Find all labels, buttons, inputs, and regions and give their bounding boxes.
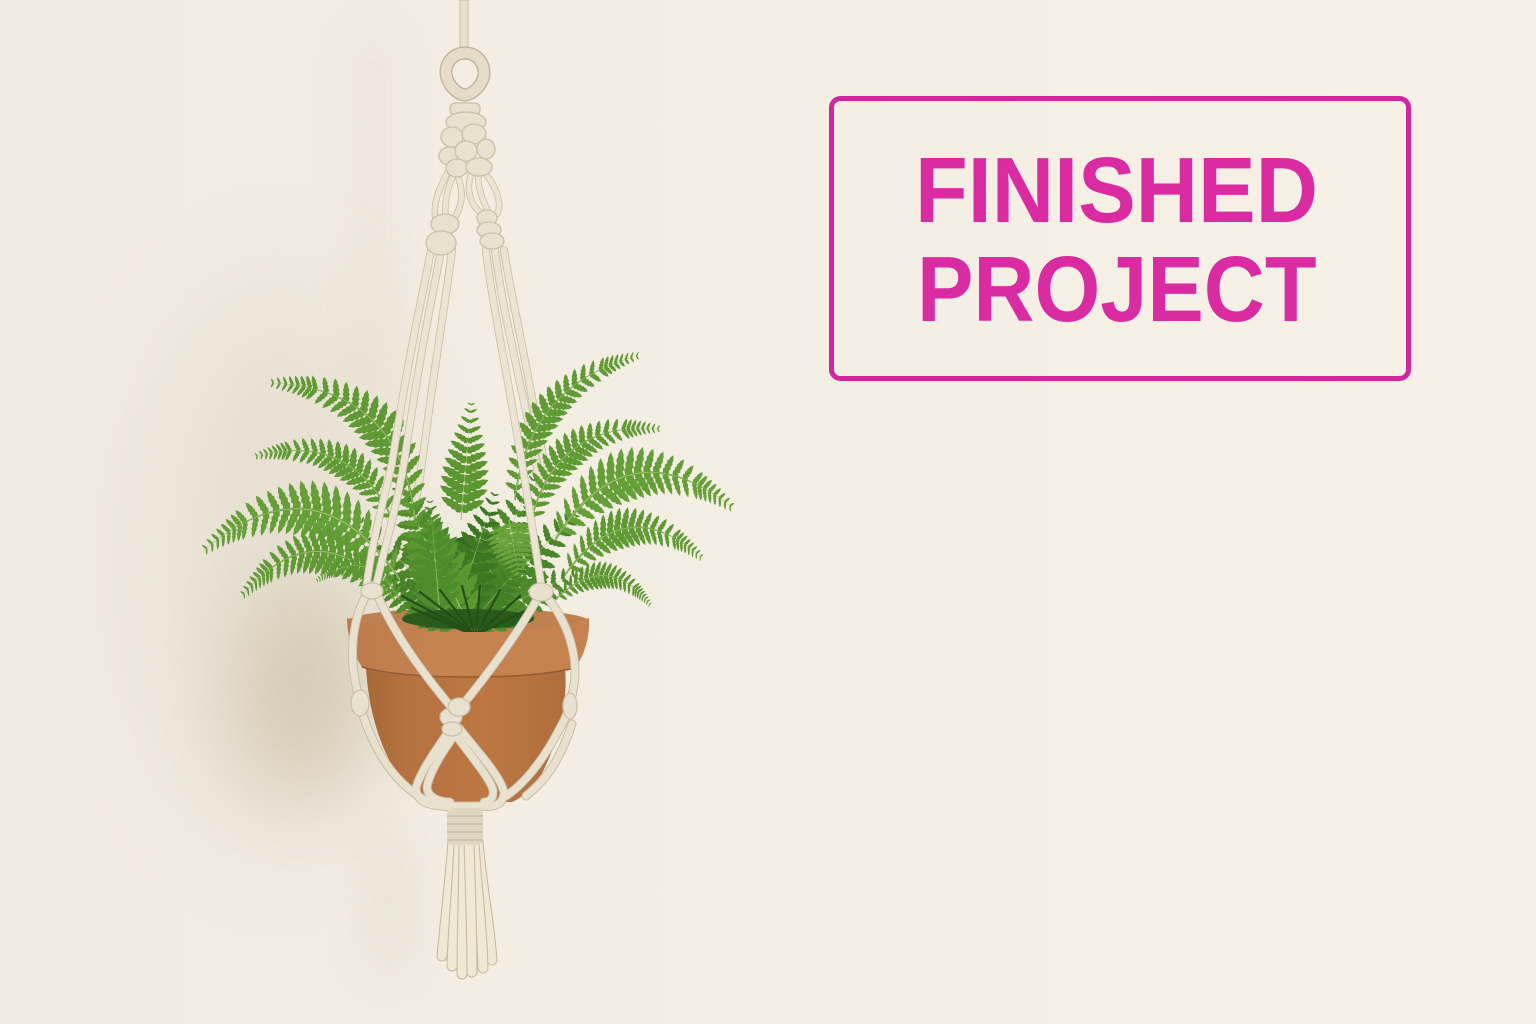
small front leaf: [482, 515, 547, 586]
heading line: project: PROJECT: [917, 237, 1316, 341]
sling knots: [351, 583, 577, 736]
right shoulder knot: [477, 210, 504, 249]
heading line: finished: FINISHED: [915, 138, 1318, 242]
left shoulder knot: [426, 214, 459, 255]
fern stems: [402, 586, 535, 632]
top knot: [439, 103, 495, 177]
macrame cords: [353, 170, 575, 808]
soft wall shadow of plant: [150, 30, 415, 970]
pot back rim: [347, 608, 589, 635]
terracotta pot: [347, 618, 589, 802]
hanging ring: [446, 53, 484, 95]
tassel wrap: [447, 808, 483, 845]
fern foliage: [200, 320, 736, 651]
hanging cord: [460, 0, 468, 48]
rear macrame cords: [412, 250, 548, 525]
callout: finished project: [832, 98, 1408, 378]
callout border: [832, 98, 1408, 378]
pot body: [366, 668, 566, 802]
tassel strands: [442, 842, 492, 974]
pot rim: [347, 618, 589, 677]
hanging macrame plant illustration: [200, 0, 736, 974]
